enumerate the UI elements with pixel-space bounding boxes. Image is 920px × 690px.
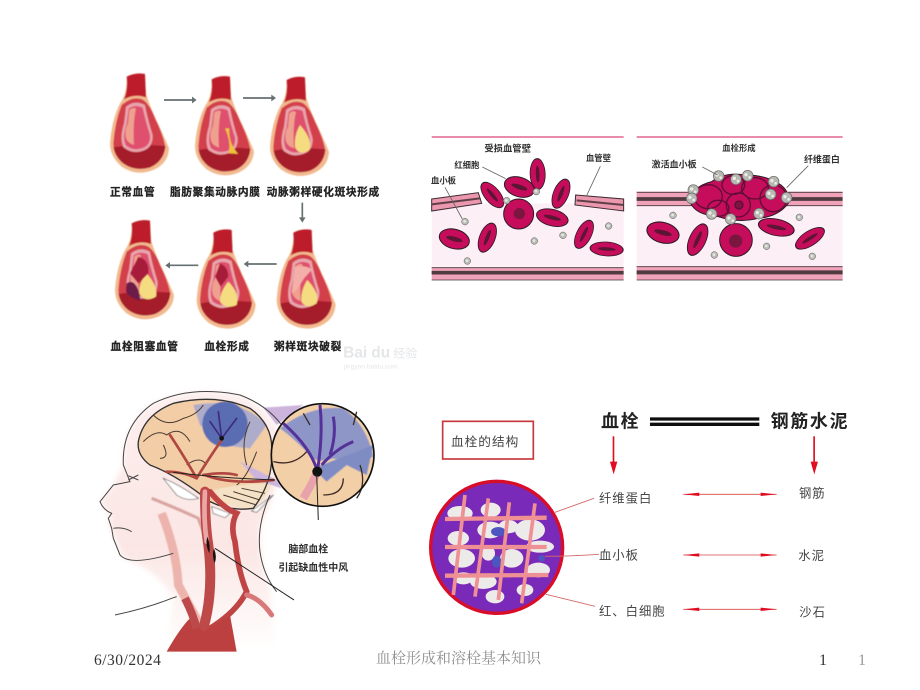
watermark: 经验 (393, 345, 417, 360)
thrombus cross-section (431, 481, 563, 613)
footer: 1 (858, 652, 866, 669)
watermark (343, 344, 417, 370)
arteries (167, 412, 273, 628)
sub-panel: damaged vessel wall (431, 137, 624, 280)
equation heading: 钢筋水泥 (771, 411, 849, 431)
panel: brain thrombus and ischemic stroke (100, 391, 374, 652)
component labels and arrows: 红、白细胞 (599, 604, 666, 619)
sub-panel: damaged vessel wall: 血小板 (431, 175, 457, 185)
footer: 1 (819, 652, 827, 669)
vessel illustrations (110, 73, 336, 329)
label box: 血栓的结构 (451, 434, 519, 449)
component labels and arrows: 水泥 (798, 549, 825, 563)
head and neck illustration (100, 391, 303, 652)
stage labels: 血栓形成 (204, 340, 250, 353)
stage labels: 粥样斑块破裂 (274, 340, 342, 353)
caption: 引起缺血性中风 (278, 561, 348, 574)
equation heading: 血栓 (601, 411, 640, 431)
clot mass (686, 170, 792, 224)
sub-panel: damaged vessel wall: 受损血管壁 (484, 143, 531, 154)
caption (278, 542, 348, 574)
panel: atherosclerosis progression (110, 73, 417, 370)
sub-panel: thrombus formed: 激活血小板 (652, 158, 697, 169)
footer (94, 647, 866, 669)
stage labels (110, 185, 380, 353)
footer: 6/30/2024 (94, 652, 161, 669)
sub-panel: thrombus formed (637, 137, 843, 280)
label box (443, 421, 533, 459)
magnified circle inset (271, 404, 374, 520)
stage labels: 脂肪聚集动脉内膜 (170, 185, 261, 198)
stage labels: 动脉粥样硬化斑块形成 (267, 185, 380, 198)
component labels and arrows: 钢筋 (799, 486, 826, 501)
component labels and arrows: 沙石 (799, 606, 826, 620)
stage labels: 血栓阻塞血管 (111, 340, 179, 353)
sub-panel: damaged vessel wall: 血管壁 (586, 153, 611, 163)
watermark: jingyan.baidu.com (343, 363, 398, 370)
sub-panel: thrombus formed: 纤维蛋白 (804, 153, 840, 164)
component labels and arrows: 纤维蛋白 (599, 490, 652, 505)
red down arrows (610, 436, 818, 474)
component labels and arrows (545, 486, 826, 620)
panel: vessel damage and clot formation (431, 137, 843, 280)
caption: 脑部血栓 (288, 542, 328, 555)
panel: thrombus structure analogy (431, 411, 849, 620)
watermark: Bai du (343, 344, 390, 361)
arrows between stages (164, 95, 306, 269)
equation heading (601, 411, 849, 431)
component labels and arrows: 血小板 (599, 548, 639, 562)
footer: 血栓形成和溶栓基本知识 (376, 647, 542, 668)
stage labels: 正常血管 (110, 185, 155, 198)
sub-panel: damaged vessel wall: 红细胞 (454, 160, 480, 170)
sub-panel: thrombus formed: 血栓形成 (722, 143, 756, 153)
